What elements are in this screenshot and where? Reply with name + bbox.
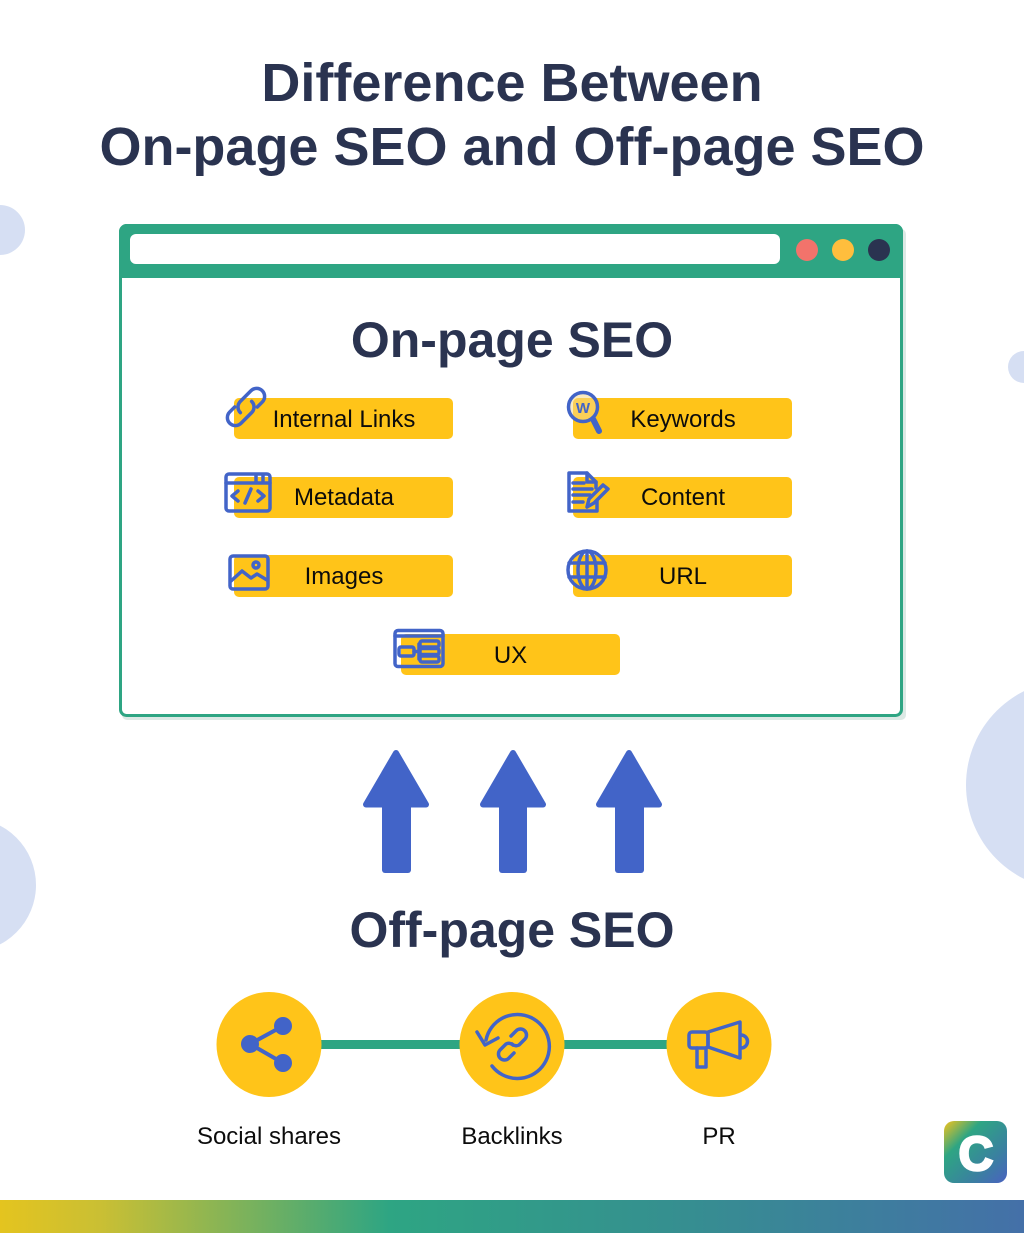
heading: Off-page SEO: Off-page SEO (349, 902, 675, 958)
item: Content: Content (641, 484, 725, 511)
item: Metadata: Metadata (294, 484, 395, 511)
panel: browser window On-page SEO (119, 224, 906, 720)
item: Content (569, 473, 792, 518)
arrows pointing up (366, 753, 659, 873)
item: URL: URL (659, 563, 707, 590)
title: Difference Between (261, 53, 763, 113)
title: On-page SEO and Off-page SEO (99, 117, 925, 177)
title (99, 53, 925, 177)
node: PR: PR (702, 1123, 736, 1150)
node: Social shares: Social shares (197, 1123, 341, 1150)
item: Keywords: W (576, 400, 591, 417)
item: UX (395, 630, 620, 675)
item: Internal Links: Internal Links (273, 406, 415, 433)
logo: C (959, 1128, 993, 1181)
heading: On-page SEO: On-page SEO (351, 312, 673, 368)
item: UX: UX (494, 642, 527, 669)
item: Internal Links (224, 385, 453, 439)
logo (944, 1121, 1007, 1183)
item: Images (230, 555, 453, 597)
address bar (130, 234, 780, 264)
item: Images: Images (305, 563, 383, 590)
node: Backlinks: Backlinks (461, 1123, 563, 1150)
item: Metadata (226, 474, 453, 518)
item: URL (568, 551, 792, 597)
footer gradient bar (0, 1200, 1024, 1233)
window control dots (796, 239, 890, 261)
node: PR (666, 992, 772, 1150)
background decorative circles (0, 205, 1024, 952)
node: Social shares (197, 992, 341, 1150)
item: Keywords: Keywords (630, 406, 736, 433)
connector line (300, 1040, 700, 1049)
node: Backlinks (460, 992, 564, 1150)
item: Keywords (568, 392, 792, 439)
